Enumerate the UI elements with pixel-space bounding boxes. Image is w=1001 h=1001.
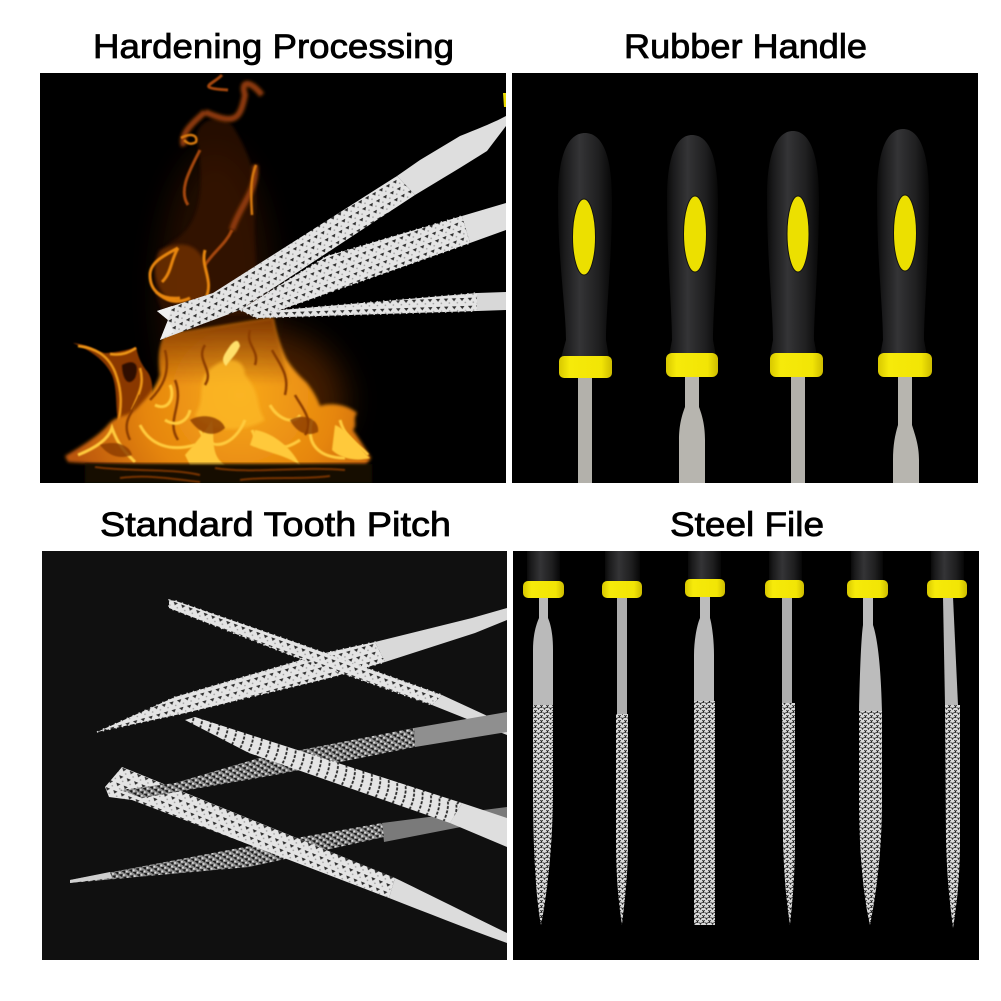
file 3: flat — [685, 551, 725, 925]
file: half round rasp — [240, 203, 506, 318]
file: dark flat rasp back — [120, 712, 507, 798]
handle 2 — [666, 135, 718, 483]
file: flat rasp — [157, 116, 506, 340]
file 1: half round — [523, 551, 564, 925]
handle 3 — [767, 131, 823, 483]
heading: Standard Tooth Pitch: Standard Tooth Pitch — [100, 506, 451, 544]
panel: steel file lineup photo — [513, 551, 979, 960]
file: round rasp — [169, 600, 507, 735]
file 6: triangular — [927, 551, 967, 928]
panel: rubber handle photo — [512, 73, 978, 483]
handle 4 — [877, 129, 932, 483]
file: thin gray rasp back — [70, 807, 507, 883]
file: half round rasp — [97, 608, 507, 732]
file 2: round — [602, 551, 642, 925]
heading: Steel File: Steel File — [670, 506, 824, 544]
panel: hardening processing photo — [40, 73, 506, 483]
panel: standard tooth pitch photo — [42, 551, 507, 960]
icon: yellow collar edge — [503, 93, 506, 107]
heading: Hardening Processing: Hardening Processing — [93, 28, 454, 66]
file: wide ridged rasp — [185, 717, 507, 847]
handle 1 — [558, 133, 612, 483]
file: thin round rasp — [247, 292, 506, 318]
file: wide flat rasp — [105, 767, 507, 943]
file 4: round — [765, 551, 804, 925]
file 5: half round wide — [847, 551, 888, 925]
flames — [65, 75, 372, 483]
heading: Rubber Handle: Rubber Handle — [624, 28, 867, 66]
